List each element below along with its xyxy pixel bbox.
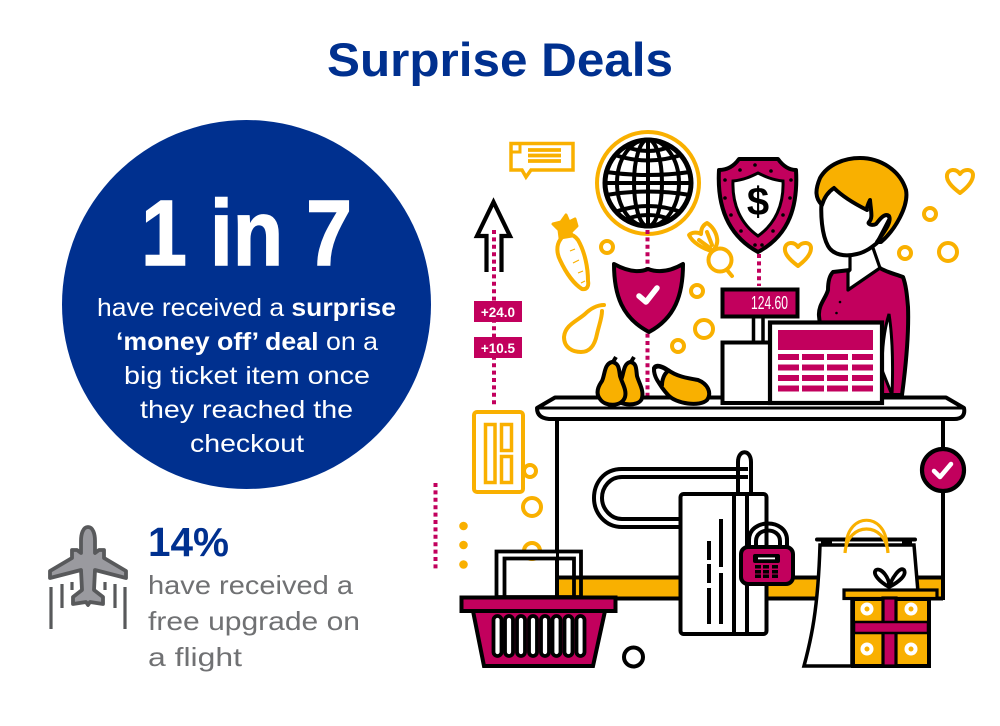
big number: 1 in 7 <box>141 181 352 285</box>
cash register: 124.60 <box>751 293 788 313</box>
statistic: 14% free upgrade: a flight <box>148 642 243 672</box>
price display <box>722 290 798 316</box>
post <box>754 317 763 342</box>
dotted line: dollar shield to register <box>757 254 761 286</box>
body <box>819 268 908 395</box>
rail barrier <box>594 452 751 527</box>
statistic description: they reached the <box>140 396 353 424</box>
icon: up arrow <box>477 202 510 272</box>
gift box <box>844 569 937 666</box>
statistic description <box>97 294 396 458</box>
decorative yellow bubbles <box>523 208 957 559</box>
statistic description: checkout <box>190 430 304 458</box>
icon: airplane <box>50 527 126 629</box>
icon: globe <box>597 132 699 234</box>
statistic: 14% free upgrade: have received a <box>148 570 354 600</box>
statistic: 14% free upgrade: free upgrade on <box>148 606 360 636</box>
icon: yellow card <box>474 412 523 492</box>
dotted line left <box>434 483 438 569</box>
monitor <box>770 322 882 403</box>
icon: hearts <box>785 170 973 266</box>
icon: padlock <box>741 524 793 584</box>
cash register <box>722 290 882 403</box>
label +10.5 <box>474 337 522 358</box>
counter base: legs and floor band <box>557 418 943 600</box>
icon: eggplant <box>654 366 709 404</box>
icon: pear outline <box>564 305 604 352</box>
buttons <box>839 301 841 303</box>
card terminal <box>680 494 766 634</box>
icon: chat bubble <box>511 143 573 177</box>
dotted line <box>492 230 496 405</box>
icon: dollar shield: $ <box>747 180 769 224</box>
yellow dots <box>459 522 468 569</box>
icon: turnip <box>689 223 732 276</box>
face <box>821 185 890 255</box>
shopping bag <box>804 520 918 666</box>
woman cashier <box>816 158 908 395</box>
statistic: 14% free upgrade: 14% <box>148 519 229 565</box>
statistic description: big ticket item once <box>124 362 370 390</box>
statistic: 14% free upgrade <box>148 519 360 672</box>
dotted line: globe to counter <box>646 230 650 396</box>
shopping basket <box>462 552 616 666</box>
counter top <box>537 398 964 419</box>
label +24.0: +24.0 <box>481 305 515 320</box>
icon: carrot <box>553 215 588 289</box>
icon: pears <box>598 357 642 405</box>
statistic description: have received a surprise <box>97 294 396 322</box>
icon: dollar shield <box>719 159 796 252</box>
hair <box>816 158 906 242</box>
till box <box>722 342 770 403</box>
label +24.0 <box>474 301 522 322</box>
panel: 1 in 7 statistic circle <box>62 120 431 489</box>
neck and collar <box>848 245 880 290</box>
label +10.5: +10.5 <box>481 341 516 356</box>
icon: check shield <box>614 264 683 332</box>
arm gap <box>882 314 893 395</box>
title: Surprise Deals <box>327 33 673 86</box>
icon: checkmark badge <box>922 449 964 491</box>
statistic description: ‘money off’ deal on a <box>116 328 378 356</box>
black ring <box>624 648 643 666</box>
